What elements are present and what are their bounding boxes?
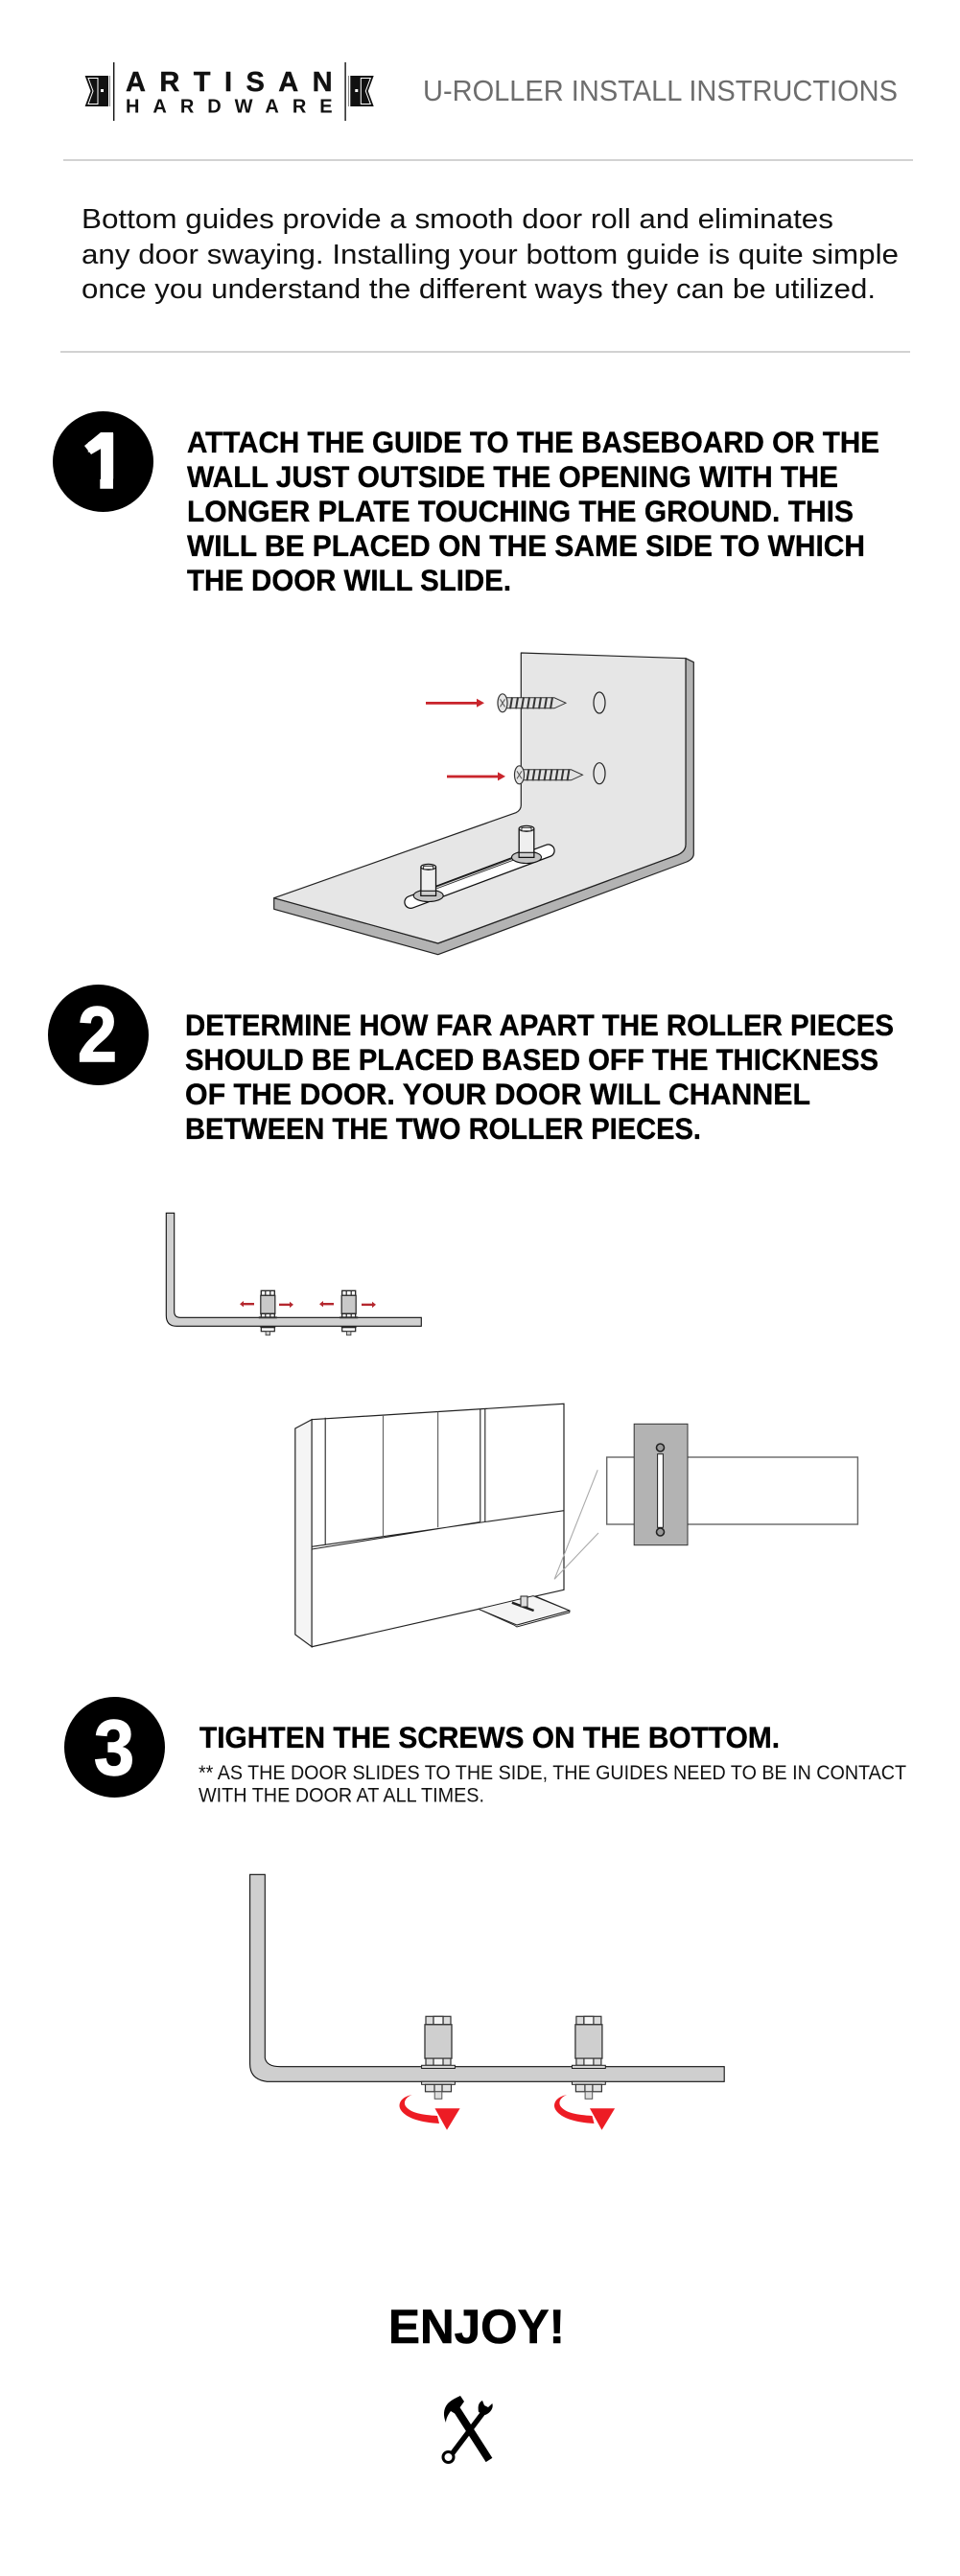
bracket face	[274, 653, 686, 943]
zoom guide lines	[554, 1470, 598, 1579]
arrow: lower screw	[447, 772, 505, 780]
logo wordmark	[126, 67, 333, 117]
step 1 heading	[187, 425, 879, 597]
step 3 note: WITH THE DOOR AT ALL TIMES.	[199, 1784, 484, 1806]
closing heading: ENJOY!	[388, 2300, 565, 2354]
intro text: once you understand the different ways they can be utilized.	[82, 274, 876, 305]
step 3 number badge: 3	[94, 1705, 134, 1792]
intro text: any door swaying. Installing your bottom guide is quite simple	[82, 240, 899, 270]
step 1 number badge	[53, 411, 153, 512]
header	[85, 62, 898, 121]
step 1 heading: THE DOOR WILL SLIDE.	[187, 563, 511, 597]
step 2 heading: BETWEEN THE TWO ROLLER PIECES.	[185, 1111, 701, 1146]
step 1 heading: ATTACH THE GUIDE TO THE BASEBOARD OR THE	[187, 425, 879, 459]
step 1 heading: WALL JUST OUTSIDE THE OPENING WITH THE	[187, 459, 838, 494]
step 2 number badge: 2	[78, 991, 117, 1079]
panel: step 2	[48, 985, 894, 1647]
slot	[410, 850, 549, 902]
bracket thickness edge	[274, 659, 693, 955]
step 2 heading: SHOULD BE PLACED BASED OFF THE THICKNESS	[185, 1042, 878, 1077]
step 3 note	[199, 1762, 906, 1806]
adjustment arrows	[240, 1301, 376, 1308]
step 3 note: ** AS THE DOOR SLIDES TO THE SIDE, THE GUIDES NEED TO BE IN CONTACT	[199, 1762, 906, 1784]
logo wordmark: ARTISAN	[126, 67, 333, 98]
step 1 heading: LONGER PLATE TOUCHING THE GROUND. THIS	[187, 494, 854, 528]
panel: step 1	[53, 411, 879, 955]
mounting holes	[594, 692, 605, 784]
logo: Artisan Hardware	[85, 62, 374, 121]
illustration: bracket with rollers and tightening arrows	[250, 1874, 724, 2130]
tightening arrows	[399, 2095, 460, 2130]
icon: left ribbon emblem	[85, 62, 114, 121]
icon: crossed hammer and wrench	[443, 2396, 493, 2462]
rollers	[413, 864, 443, 901]
logo wordmark: HARDWARE	[126, 96, 333, 117]
illustration: door with bottom guide	[295, 1404, 598, 1647]
step 2 number badge	[48, 985, 149, 1085]
step 1 number badge: 1	[83, 418, 128, 505]
arrow: upper screw	[426, 699, 484, 708]
step 2 heading	[185, 1008, 894, 1146]
header title: U-ROLLER INSTALL INSTRUCTIONS	[423, 74, 898, 107]
illustration: L bracket with screws	[274, 653, 693, 955]
intro text: Bottom guides provide a smooth door roll and eliminates	[82, 204, 833, 235]
guide plate under door	[479, 1595, 570, 1627]
illustration: side view bracket with adjustable rollers	[166, 1213, 421, 1335]
intro text	[82, 204, 899, 305]
step 2 heading: DETERMINE HOW FAR APART THE ROLLER PIECES	[185, 1008, 894, 1042]
screws	[498, 694, 566, 712]
icon: right ribbon emblem	[344, 62, 374, 121]
step 3 number badge	[64, 1697, 165, 1798]
step 2 heading: OF THE DOOR. YOUR DOOR WILL CHANNEL	[185, 1077, 810, 1111]
panel: step 3	[64, 1697, 906, 2130]
step 3 heading: TIGHTEN THE SCREWS ON THE BOTTOM.	[199, 1720, 780, 1754]
step 1 heading: WILL BE PLACED ON THE SAME SIDE TO WHICH	[187, 528, 865, 563]
illustration: detail of guide slot	[607, 1424, 857, 1545]
